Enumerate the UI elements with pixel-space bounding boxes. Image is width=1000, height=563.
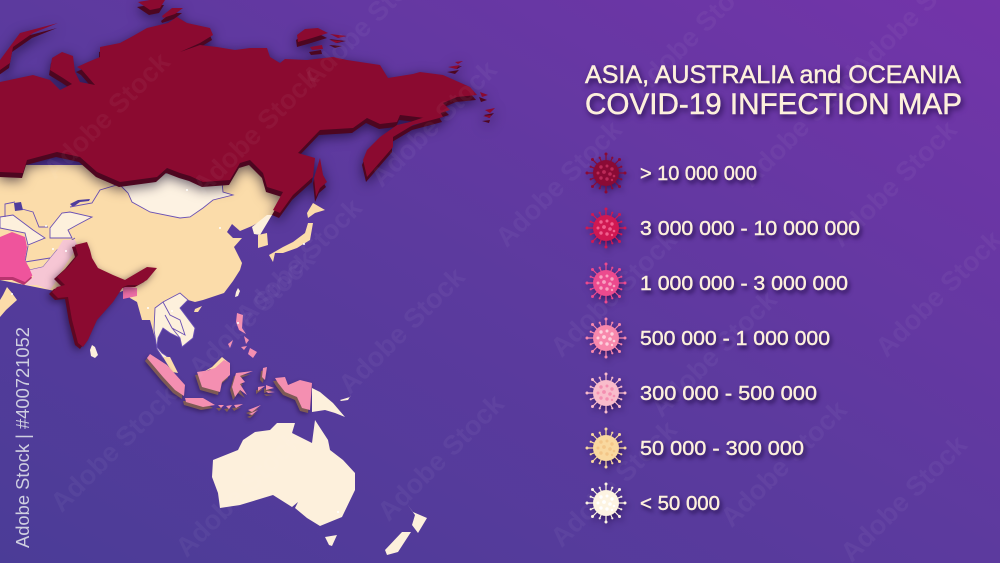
legend row: 3 to 10 million — [587, 209, 860, 247]
Kazakhstan and Afghanistan borders — [5, 184, 120, 275]
Indochina pale countries — [154, 293, 195, 358]
Novaya Zemlya — [0, 23, 58, 70]
icon: dark red virus — [587, 154, 625, 192]
legend — [587, 154, 860, 522]
Japan — [269, 203, 325, 262]
Arabian peninsula fragment — [0, 287, 17, 317]
Kamchatka — [363, 112, 443, 177]
label: > 10 000 000 — [640, 163, 757, 185]
icon: pale pink virus — [587, 374, 625, 412]
Philippines — [228, 313, 257, 358]
label: 500 000 - 1 000 000 — [640, 328, 830, 350]
Indonesia — [147, 354, 312, 415]
watermarks: Adobe Stock — [333, 261, 471, 400]
Asia base: China, Kazakhstan, Afghanistan and neighbours — [0, 165, 290, 345]
title line 1: ASIA, AUSTRALIA and OCEANIA — [585, 61, 961, 89]
Sulawesi — [232, 371, 253, 397]
icon: crimson virus — [587, 209, 625, 247]
Korea — [252, 215, 272, 235]
legend row: 1 to 3 million — [587, 264, 848, 302]
watermarks: Adobe Stock — [372, 388, 510, 527]
Sumatra — [147, 354, 185, 396]
Sri Lanka — [90, 345, 98, 358]
Pakistan — [25, 240, 78, 290]
icon: pink virus — [587, 319, 625, 357]
watermarks: Adobe Stock — [38, 46, 176, 185]
watermarks: Adobe Stock — [825, 114, 963, 253]
legend row: over 10 million — [587, 154, 757, 192]
India — [52, 242, 157, 347]
watermarks: Adobe Stock — [230, 192, 368, 331]
label: 3 000 000 - 10 000 000 — [640, 218, 860, 240]
legend row: 500 thousand to 1 million — [587, 319, 830, 357]
capital dots — [11, 189, 339, 513]
Russia — [0, 0, 495, 213]
Bangladesh — [123, 286, 137, 299]
Indochina internal borders — [163, 302, 185, 338]
label: 300 000 - 500 000 — [640, 383, 817, 405]
Sakhalin — [314, 158, 327, 197]
title block — [585, 61, 962, 121]
label: 1 000 000 - 3 000 000 — [640, 273, 848, 295]
watermarks: Adobe Stock — [715, 394, 853, 533]
Papua New Guinea — [312, 388, 351, 417]
Borneo — [197, 358, 230, 392]
watermarks: Adobe Stock — [365, 54, 503, 193]
legend row: 300 to 500 thousand — [587, 374, 817, 412]
Severnaya Zemlya — [138, 0, 183, 18]
Tasmania — [325, 535, 337, 546]
Central Asia pale countries — [0, 212, 92, 245]
watermarks: Adobe Stock — [545, 414, 683, 553]
title line 2: COVID-19 INFECTION MAP — [585, 88, 962, 121]
label: < 50 000 — [640, 493, 720, 515]
watermarks: Adobe Stock — [183, 244, 321, 383]
Malay peninsula — [163, 357, 178, 373]
watermarks: Adobe Stock — [170, 424, 308, 563]
New Zealand — [385, 504, 427, 555]
icon: hot pink virus — [587, 264, 625, 302]
Caspian and inland lakes — [14, 199, 90, 211]
watermarks: Adobe Stock — [187, 62, 325, 201]
icon: beige virus — [587, 429, 625, 467]
South Korea — [258, 233, 268, 248]
icon: cream virus — [587, 484, 625, 522]
vertical stock credit: Adobe Stock | #400721052 — [13, 327, 33, 548]
Iran — [0, 232, 33, 282]
label: 50 000 - 300 000 — [640, 438, 804, 460]
Hainan — [194, 306, 202, 312]
map: Asia, Australia and Oceania — [0, 0, 495, 555]
legend row: 50 to 300 thousand — [587, 429, 804, 467]
Mongolia — [120, 173, 233, 218]
Wrangel and Chukotka islands — [448, 61, 495, 118]
Australia — [212, 420, 355, 526]
Taiwan — [235, 288, 240, 297]
watermarks: Adobe Stock — [735, 54, 873, 193]
watermarks: Adobe Stock — [490, 114, 628, 253]
Java and lesser Sunda islands — [185, 398, 261, 415]
watermarks: Adobe Stock — [545, 224, 683, 363]
watermarks: Adobe Stock — [45, 379, 183, 518]
watermarks: Adobe Stock — [645, 284, 783, 423]
New Siberian islands — [297, 28, 347, 50]
Moluccas — [258, 367, 275, 393]
Western New Guinea — [275, 377, 312, 410]
Borneo north: Malaysia — [205, 357, 228, 371]
legend row: under 50 thousand — [587, 484, 720, 522]
